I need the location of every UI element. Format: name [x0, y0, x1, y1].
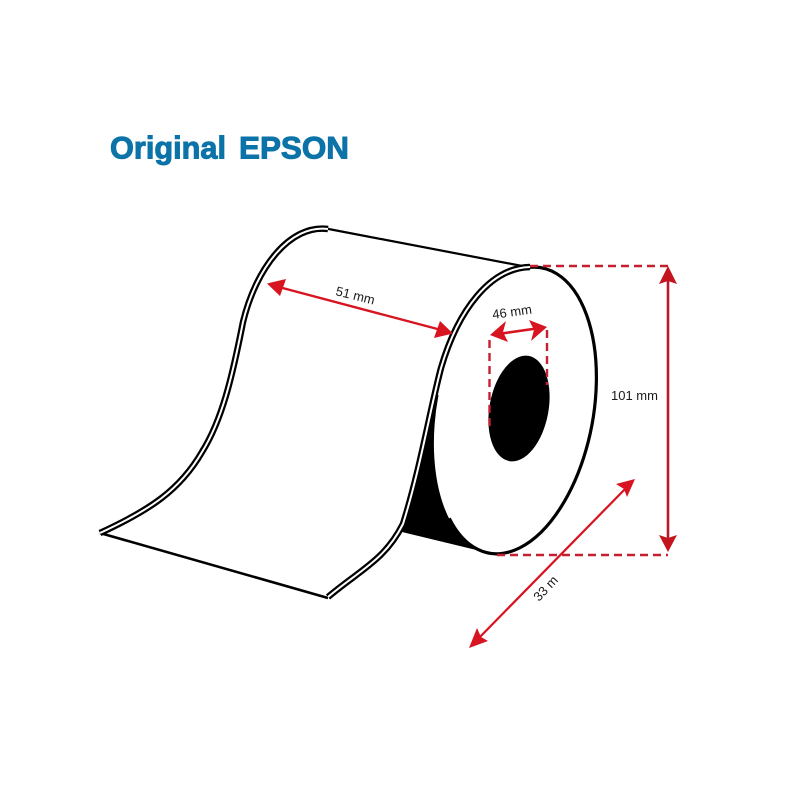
sheet left edge: [100, 229, 328, 533]
label: 51 mm: 51 mm: [334, 283, 376, 308]
arrow: 46 mm core: [490, 320, 547, 342]
roll underside shadow: [402, 395, 510, 555]
roll core hole: [480, 351, 558, 466]
arrow: 33 m length: [469, 479, 635, 648]
label: 33 m: 33 m: [530, 573, 561, 604]
paper roll illustration: [100, 228, 618, 598]
roll outer rim: [444, 260, 618, 567]
arrow: 101 mm height: [659, 266, 677, 552]
guide: dashed dimension lines: [490, 266, 668, 555]
title: EPSON: [239, 130, 349, 166]
top edge of roll: [326, 228, 530, 268]
label: 101 mm: 101 mm: [611, 388, 658, 403]
arrow: 51 mm width: [267, 279, 453, 338]
title: Original: [110, 130, 226, 166]
roll end face: [412, 254, 618, 567]
bottom edge of sheet: [100, 533, 328, 598]
label: 46 mm: 46 mm: [491, 302, 533, 322]
sheet right edge: [328, 267, 530, 597]
